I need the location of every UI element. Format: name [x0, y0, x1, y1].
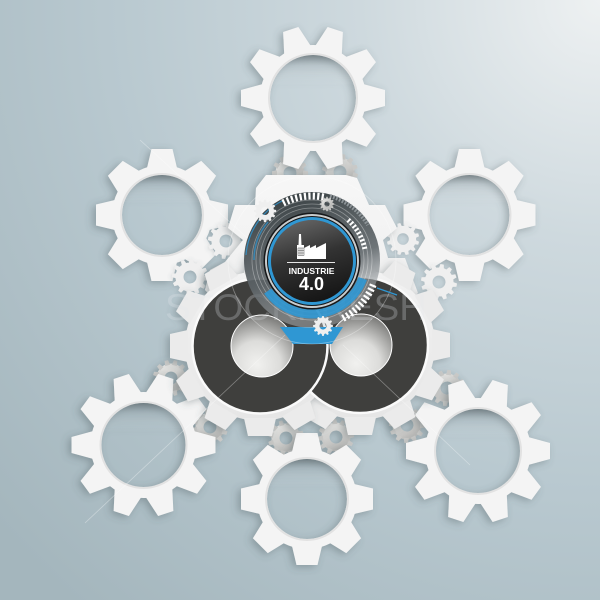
label: INDUSTRIE: INDUSTRIE	[289, 266, 335, 276]
blue arc bottom	[268, 278, 363, 314]
silver bevel	[266, 215, 358, 307]
outer gear: bottom left	[52, 354, 235, 536]
small gear: top right	[319, 151, 361, 193]
label: 4.0: 4.0	[299, 274, 324, 294]
small dial gear: top	[320, 197, 334, 211]
small gear: upper right	[383, 219, 423, 259]
central gear: top	[205, 175, 418, 330]
small gear: lower right	[427, 368, 467, 408]
outer gear: bottom right	[387, 360, 569, 542]
small gear: bottom far right	[388, 406, 426, 444]
outer gear: left	[96, 149, 228, 281]
black base	[264, 212, 360, 310]
small dial gear: top left	[254, 200, 276, 222]
outer gear: right	[404, 149, 536, 281]
blue ring and disc	[270, 218, 354, 304]
small gear: bottom far left	[187, 404, 233, 450]
small gear: top left	[272, 155, 308, 191]
blue arc thin	[246, 201, 282, 255]
lower right tick marks	[342, 285, 373, 319]
faint diagonal lines	[85, 140, 470, 523]
top right chain marks	[330, 196, 368, 225]
outer gear: top	[222, 7, 404, 189]
large gear: right	[270, 255, 450, 435]
small gear: upper left	[206, 221, 246, 261]
blue connector	[280, 327, 343, 344]
dial outer ring	[244, 192, 380, 328]
small gear: lower left	[149, 356, 193, 400]
blue accent line	[377, 288, 397, 295]
small dial gear: bottom	[313, 316, 333, 336]
small gear: mid left	[170, 257, 210, 297]
divider line	[287, 262, 335, 263]
small light gears above outer gears	[170, 219, 460, 303]
top tick marks	[283, 196, 325, 203]
large gear: left	[170, 256, 350, 436]
watermark: STOCKFRESH	[165, 287, 427, 328]
small gear: bottom centre left	[265, 417, 307, 459]
technology dial	[244, 192, 397, 328]
dark ring: left	[192, 278, 328, 414]
outer gear: bottom	[241, 433, 373, 565]
blue arc left	[254, 222, 268, 260]
small gear: bottom centre right	[312, 413, 360, 461]
icon: factory	[297, 234, 326, 259]
small gear: mid right	[418, 261, 460, 303]
right tick marks	[348, 220, 365, 251]
small background gears	[149, 151, 467, 461]
dark ring: right	[292, 277, 428, 413]
